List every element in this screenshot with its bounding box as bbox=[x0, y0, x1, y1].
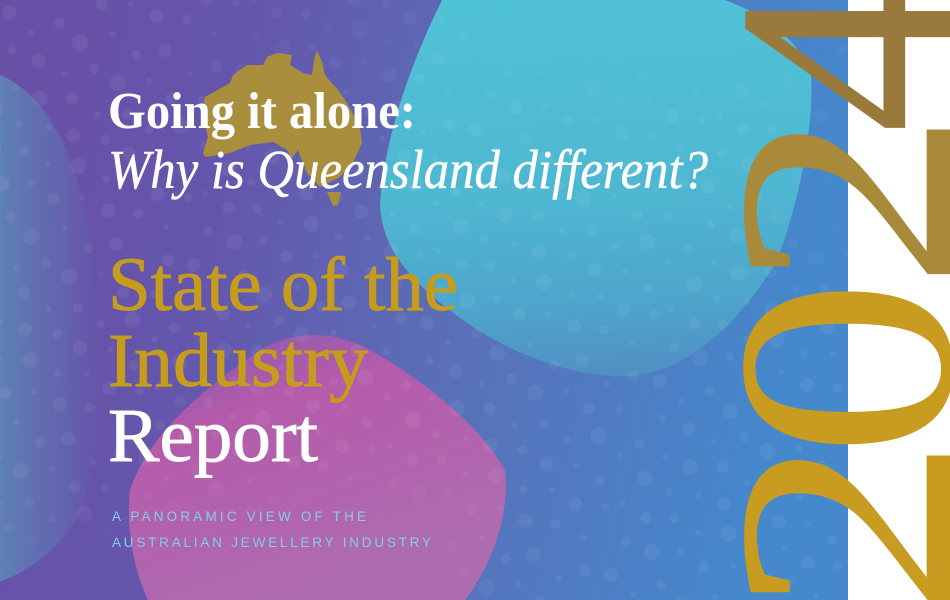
white side panel bbox=[848, 0, 950, 600]
blob: teal bbox=[380, 0, 812, 376]
title: State of the: State of the bbox=[108, 243, 458, 327]
blob: pink bbox=[129, 335, 506, 600]
title: Industry: Industry bbox=[108, 319, 368, 403]
tagline bbox=[112, 509, 431, 550]
blob: left blue bbox=[0, 75, 100, 582]
title: Report: Report bbox=[108, 394, 318, 478]
icon: Australia map bbox=[202, 50, 362, 206]
tagline: AUSTRALIAN JEWELLERY INDUSTRY bbox=[112, 535, 431, 550]
tagline: A PANORAMIC VIEW OF THE bbox=[112, 509, 366, 524]
heading: Going it alone: Going it alone: bbox=[108, 83, 416, 140]
year: 2024 vertical bbox=[673, 0, 950, 600]
subheading: Why is Queensland different: Why is Queensland different? bbox=[108, 139, 708, 200]
